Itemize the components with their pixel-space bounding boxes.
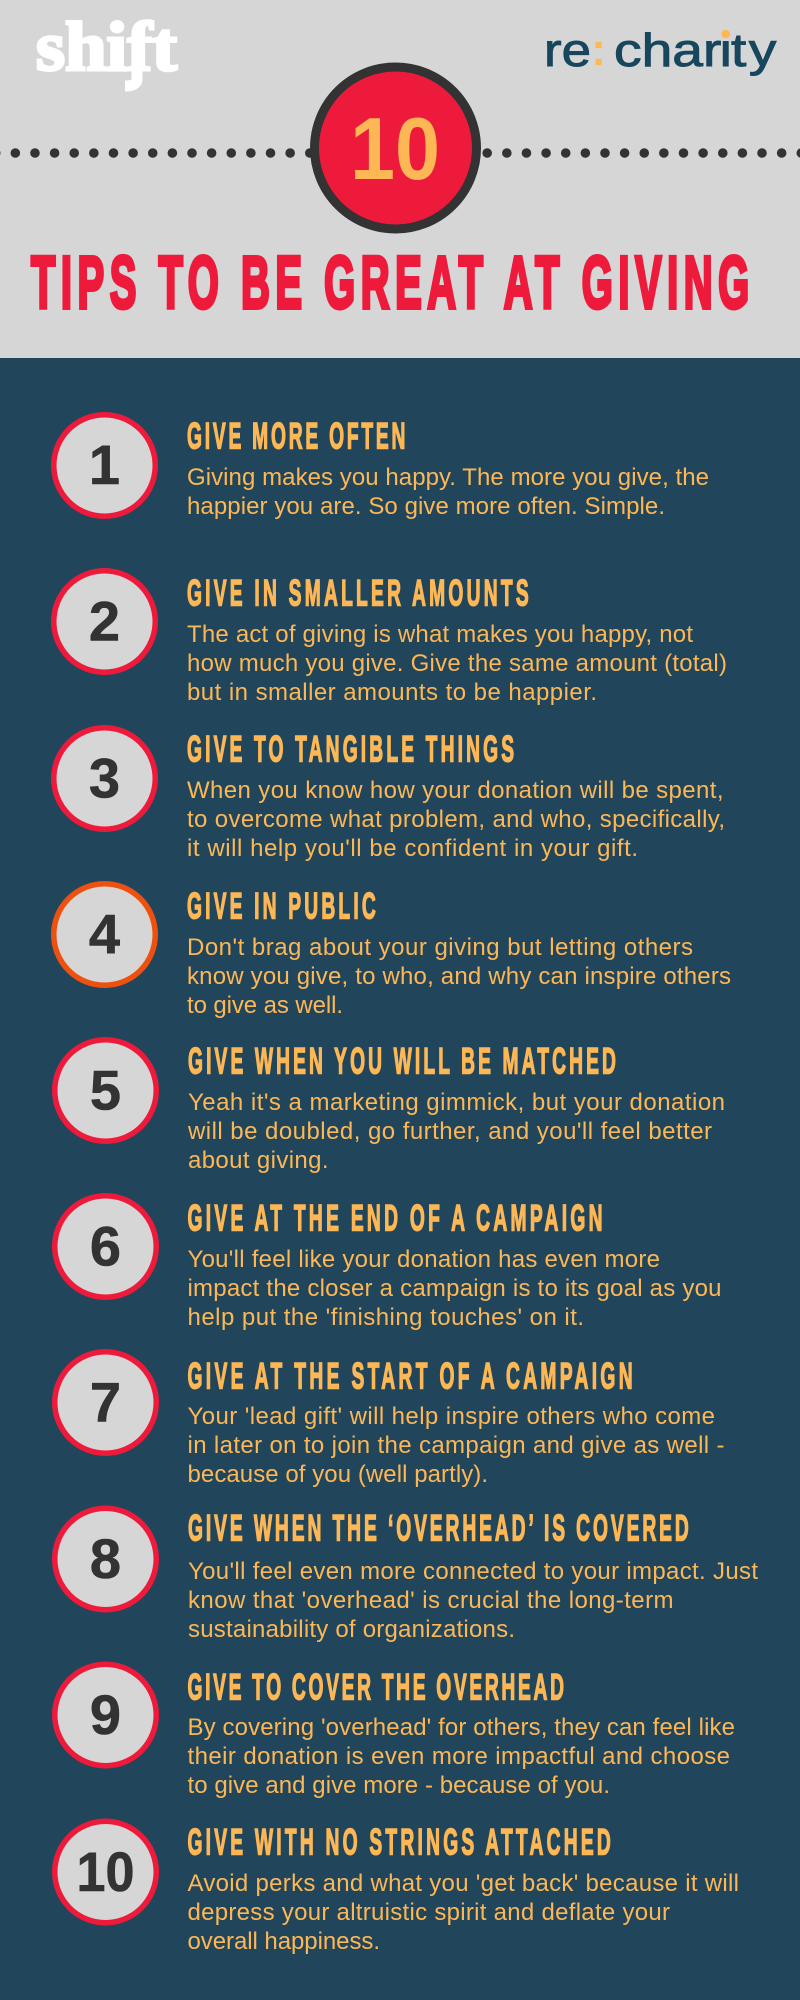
body 4: Don't brag about your giving but letting others bbox=[187, 934, 693, 961]
heading 5: GIVE WHEN YOU WILL BE MATCHED bbox=[188, 1041, 616, 1082]
logo: shift: shift bbox=[36, 9, 177, 86]
logo: re:charity: i bbox=[720, 24, 732, 76]
tip 1 bbox=[54, 415, 709, 520]
body 7: because of you (well partly). bbox=[188, 1461, 488, 1488]
body 6: help put the 'finishing touches' on it. bbox=[188, 1304, 584, 1331]
number badge 4: 4 bbox=[89, 902, 120, 966]
body 4: to give as well. bbox=[187, 992, 343, 1019]
body 9: By covering 'overhead' for others, they can feel like bbox=[188, 1714, 735, 1741]
body 6 bbox=[188, 1246, 722, 1331]
panel: header bbox=[0, 0, 800, 358]
logo: re:charity bbox=[544, 24, 779, 76]
number badge 3: 3 bbox=[89, 746, 120, 810]
heading 10: GIVE WITH NO STRINGS ATTACHED bbox=[188, 1822, 611, 1863]
body 10: overall happiness. bbox=[188, 1928, 380, 1955]
body 9: their donation is even more impactful and choose bbox=[188, 1743, 730, 1770]
number badge 8 bbox=[55, 1508, 156, 1610]
dotted line left bbox=[0, 148, 310, 158]
number badge 2 bbox=[54, 571, 155, 672]
number badge 10 bbox=[55, 1821, 156, 1923]
heading 6: GIVE AT THE END OF A CAMPAIGN bbox=[188, 1198, 602, 1239]
body 3: it will help you'll be confident in your gift. bbox=[187, 835, 638, 862]
body 6: impact the closer a campaign is to its goal as you bbox=[188, 1275, 722, 1302]
number badge 5: 5 bbox=[90, 1058, 121, 1122]
body 4: know you give, to who, and why can inspire others bbox=[187, 963, 731, 990]
body 8: know that 'overhead' is crucial the long-term bbox=[188, 1587, 674, 1614]
number badge 8: 8 bbox=[90, 1527, 121, 1590]
body 8: You'll feel even more connected to your impact. Just bbox=[188, 1558, 758, 1585]
body 8: sustainability of organizations. bbox=[188, 1616, 515, 1643]
body 2: The act of giving is what makes you happy, not bbox=[187, 621, 693, 648]
number badge 9: 9 bbox=[90, 1683, 121, 1746]
body 2: but in smaller amounts to be happier. bbox=[187, 679, 597, 706]
body 10: depress your altruistic spirit and deflate your bbox=[188, 1899, 670, 1926]
tip 8 bbox=[55, 1508, 758, 1643]
number badge 5 bbox=[55, 1040, 156, 1141]
logo: re:charity: re bbox=[544, 24, 591, 76]
body 2: how much you give. Give the same amount (total) bbox=[187, 650, 727, 677]
number badge 2: 2 bbox=[89, 590, 120, 652]
tip 2 bbox=[54, 571, 727, 706]
number badge 7 bbox=[55, 1352, 156, 1453]
body 8 bbox=[188, 1558, 758, 1643]
heading 7: GIVE AT THE START OF A CAMPAIGN bbox=[188, 1356, 633, 1397]
body 5: about giving. bbox=[188, 1147, 328, 1174]
body 9 bbox=[188, 1714, 735, 1799]
number badge 7: 7 bbox=[90, 1370, 121, 1434]
badge: big 10 bbox=[314, 67, 476, 229]
number badge 4 bbox=[54, 884, 155, 985]
tip 5 bbox=[55, 1040, 725, 1174]
body 1: Giving makes you happy. The more you give, the bbox=[187, 464, 709, 491]
body 7: in later on to join the campaign and give as well - bbox=[188, 1432, 724, 1459]
body 5: will be doubled, go further, and you'll feel better bbox=[187, 1118, 712, 1145]
badge: big 10: 10 bbox=[350, 99, 440, 198]
body 5 bbox=[187, 1089, 725, 1174]
heading 3: GIVE TO TANGIBLE THINGS bbox=[187, 729, 514, 770]
body 3: When you know how your donation will be spent, bbox=[187, 777, 724, 804]
number badge 3 bbox=[54, 728, 155, 829]
heading 9: GIVE TO COVER THE OVERHEAD bbox=[188, 1667, 564, 1708]
body 6: You'll feel like your donation has even more bbox=[188, 1246, 660, 1273]
heading 4: GIVE IN PUBLIC bbox=[187, 886, 376, 927]
tip 7 bbox=[55, 1352, 724, 1488]
number badge 1: 1 bbox=[89, 433, 120, 496]
number badge 6 bbox=[55, 1196, 156, 1297]
body 1: happier you are. So give more often. Simple. bbox=[187, 493, 665, 520]
body 2 bbox=[187, 621, 727, 706]
tip 3 bbox=[54, 728, 725, 862]
body 9: to give and give more - because of you. bbox=[188, 1772, 610, 1799]
number badge 10: 10 bbox=[76, 1840, 134, 1903]
logo: re:charity: ty bbox=[731, 24, 779, 76]
heading 1: GIVE MORE OFTEN bbox=[187, 416, 405, 457]
tip 4 bbox=[54, 884, 731, 1019]
body 10: Avoid perks and what you 'get back' because it will bbox=[188, 1870, 739, 1897]
title: TIPS TO BE GREAT AT GIVING bbox=[31, 241, 749, 324]
heading 8: GIVE WHEN THE ‘OVERHEAD’ IS COVERED bbox=[188, 1508, 689, 1549]
tip 9 bbox=[55, 1664, 735, 1799]
tip 10 bbox=[55, 1821, 739, 1955]
body 5: Yeah it's a marketing gimmick, but your donation bbox=[188, 1089, 725, 1116]
heading 2: GIVE IN SMALLER AMOUNTS bbox=[187, 573, 529, 614]
number badge 1 bbox=[54, 415, 155, 516]
logo: re:charity: char bbox=[614, 24, 721, 76]
body 1 bbox=[187, 464, 709, 520]
body 7 bbox=[188, 1403, 724, 1488]
logo: re:charity: : bbox=[593, 29, 604, 73]
number badge 6: 6 bbox=[90, 1214, 121, 1278]
body 3: to overcome what problem, and who, specifically, bbox=[187, 806, 725, 833]
body 10 bbox=[188, 1870, 739, 1955]
tip 6 bbox=[55, 1196, 722, 1331]
body 3 bbox=[187, 777, 725, 862]
body 7: Your 'lead gift' will help inspire others who come bbox=[188, 1403, 715, 1430]
dotted line right bbox=[487, 148, 800, 158]
body 4 bbox=[187, 934, 731, 1019]
number badge 9 bbox=[55, 1664, 156, 1766]
